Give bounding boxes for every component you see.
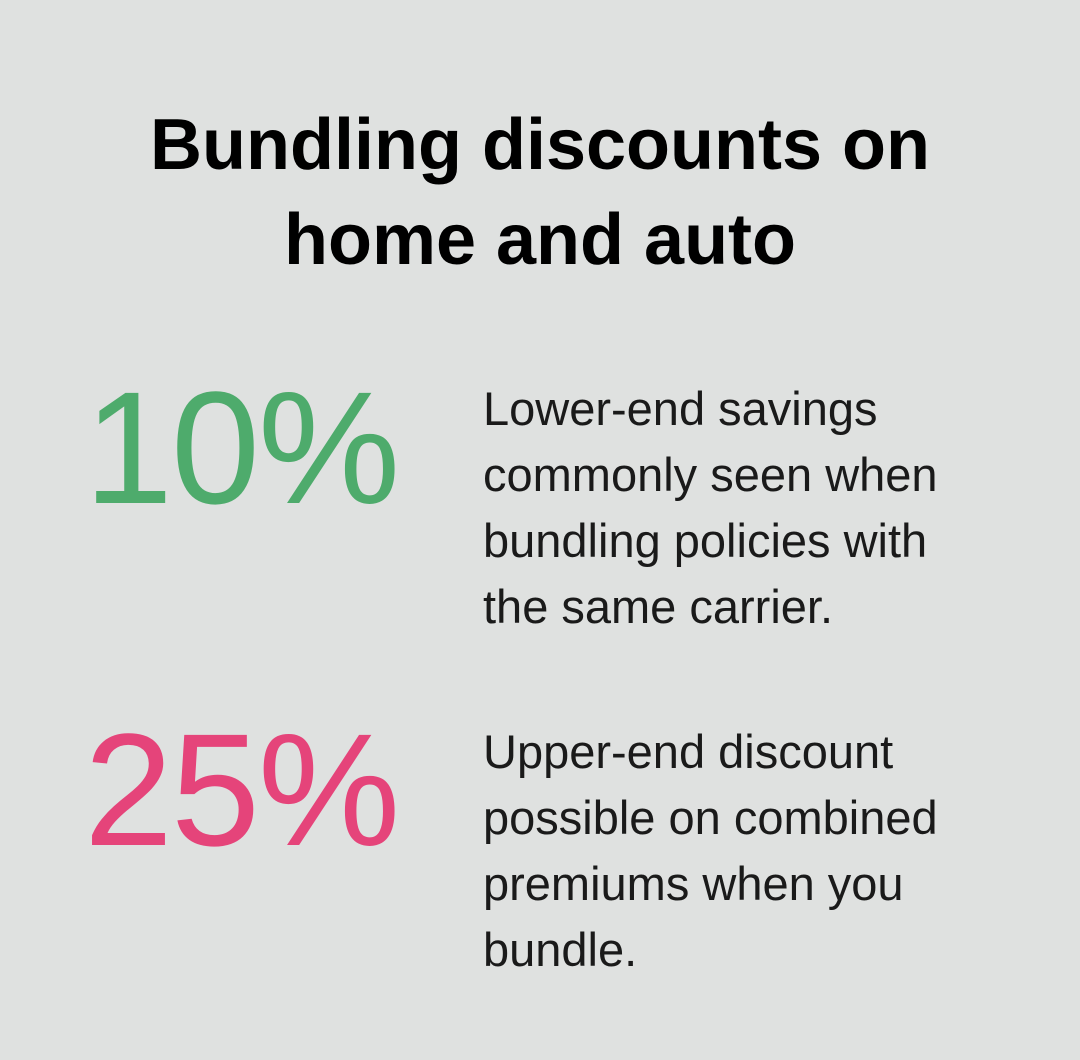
text: 25% description: possible on combined: [483, 791, 938, 844]
text: 10% description: commonly seen when: [483, 448, 938, 501]
title: [150, 105, 930, 280]
text: 10% description: the same carrier.: [483, 580, 833, 633]
text: 10% description: [483, 382, 938, 633]
text: 10% description: bundling policies with: [483, 514, 927, 567]
stat: 10%: 10%: [84, 358, 398, 537]
title: Bundling discounts on: [150, 105, 930, 185]
text: 25% description: Upper-end discount: [483, 725, 893, 778]
stat: 25%: 25%: [84, 700, 398, 879]
text: 25% description: bundle.: [483, 923, 637, 976]
text: 10% description: Lower-end savings: [483, 382, 878, 435]
title: home and auto: [284, 200, 796, 280]
text: 25% description: [483, 725, 938, 976]
text: 25% description: premiums when you: [483, 857, 904, 910]
